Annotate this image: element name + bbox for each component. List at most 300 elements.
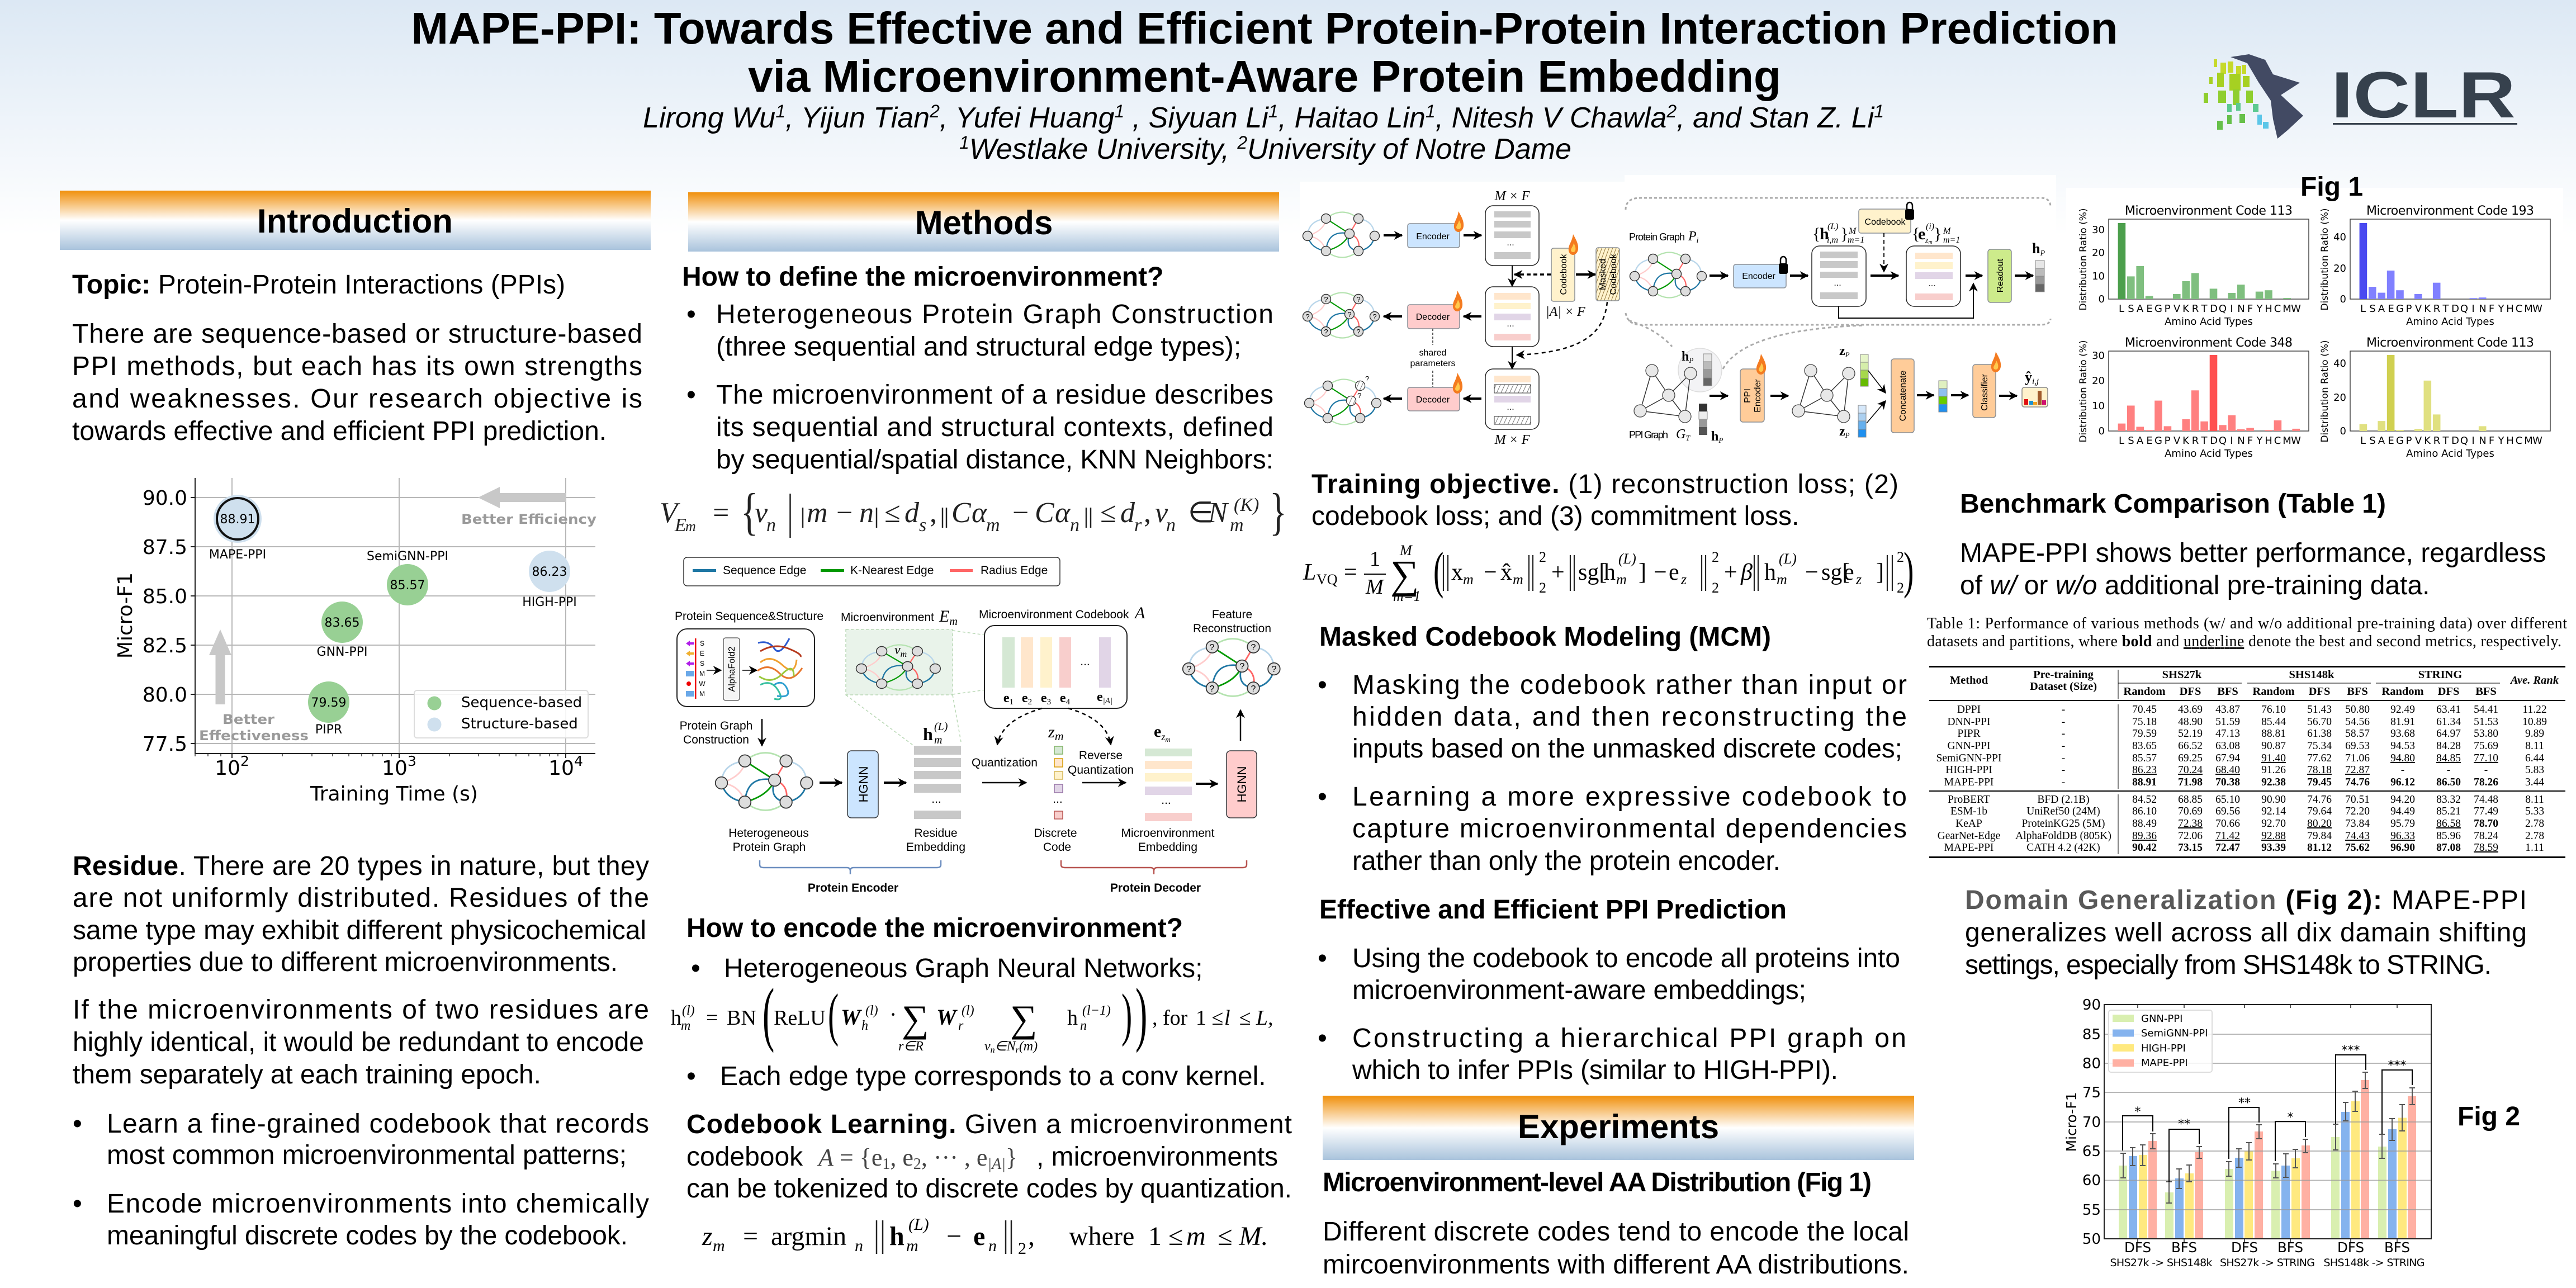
table header: BFS [2475, 685, 2497, 698]
table rows: no pre-training: 48.90 [2178, 716, 2203, 728]
table rows: with pre-training: 73.15 [2178, 842, 2203, 854]
formula: microenvironment definition: V [660, 497, 680, 529]
formula: quantization [702, 1215, 1268, 1258]
row: masked decoding: ? [1357, 391, 1361, 400]
panel: feature reconstruction: ? [1251, 684, 1256, 694]
table rows: no pre-training: 84.85 [2436, 752, 2461, 764]
row: decoder reconstruction: ? [1372, 312, 1377, 321]
chart: code 113 green: P [2165, 303, 2171, 315]
formula: VQ loss: h [1604, 560, 1616, 585]
heading: how to encode: How to encode the microenvironment? [686, 913, 1183, 943]
table rows: no pre-training: 3.44 [2525, 776, 2544, 788]
formula: microenvironment definition: α [972, 497, 988, 529]
formula: microenvironment definition: m [1230, 515, 1244, 536]
table rows: with pre-training: 94.20 [2390, 794, 2415, 806]
chart: training time vs micro-F1 bubbles: HIGH-PPI [522, 595, 577, 609]
panel: protein sequence and structure: W [699, 680, 705, 688]
formula: VQ loss: m [1463, 571, 1474, 588]
table rows: no pre-training: - [2062, 764, 2065, 776]
formula: microenvironment definition: n [1166, 515, 1176, 536]
formula: microenvironment definition: ≤ [1100, 497, 1116, 529]
bullets: definition: The microenvironment of a residue describes [716, 380, 1273, 410]
table rows: with pre-training: 90.90 [2261, 794, 2286, 806]
formula: microenvironment definition: C [951, 497, 972, 529]
panel: microenvironment zoom: m [901, 650, 907, 659]
table rows: no pre-training: 66.52 [2178, 740, 2203, 752]
table rows: no pre-training: - [2447, 764, 2450, 776]
chart: code 348 red: S [2128, 435, 2134, 447]
chart: code 348 red: V [2174, 435, 2181, 447]
chart: domain generalization bars: DFS [2124, 1239, 2151, 1256]
table rows: no pre-training: 63.41 [2436, 704, 2461, 716]
formula: VQ loss: ( [1433, 542, 1443, 599]
text: codebook learning [686, 1110, 1292, 1204]
table rows: no pre-training: 72.87 [2345, 764, 2370, 776]
table rows: with pre-training: 74.48 [2474, 794, 2498, 806]
row: encoder reconstruction: M × F [1494, 189, 1530, 203]
panel: PPI graph encoder: T [1685, 434, 1690, 443]
panel: protein embedding pipeline: Readout [1996, 258, 2005, 292]
text: codebook learning: , e [890, 1144, 913, 1171]
formula: HGNN update: (l) [962, 1003, 974, 1018]
chart: code 113 green: G [2154, 303, 2162, 315]
chart: code 193 blue: L [2360, 303, 2366, 315]
text: AA distribution: Different discrete codes tend to encode the local [1323, 1217, 1909, 1247]
chart: domain generalization bars: BFS [2277, 1239, 2303, 1256]
panel: protein embedding pipeline: P [2039, 249, 2045, 258]
formula: VQ loss: M [1365, 575, 1385, 599]
legend: edge types [684, 557, 1060, 586]
bullets: MCM: rather than only the protein encoder. [1352, 846, 1781, 876]
formula: VQ loss: m [1616, 571, 1627, 588]
panel: protein embedding pipeline: Encoder [1742, 272, 1775, 281]
table rows: no pre-training: PIPR [1957, 728, 1981, 740]
chart: code 113 yellow: R [2433, 435, 2440, 447]
formula: VQ loss: − [1805, 560, 1819, 585]
discrete code squares: Discrete [1034, 827, 1077, 840]
table rows: with pre-training: 96.90 [2390, 842, 2415, 854]
chart: domain generalization bars: Micro-F1 [2063, 1092, 2080, 1152]
table rows: no pre-training: 96.12 [2390, 776, 2415, 788]
panel: PPI graph encoder: i,j [2032, 377, 2039, 386]
encoder HGNN block [820, 751, 906, 818]
panel: PPI graph encoder [1629, 344, 2048, 444]
microenvironment embedding stack [1121, 722, 1215, 854]
chart: code 348 red: Distribution Ratio (%) [2078, 340, 2089, 443]
title [411, 3, 2118, 101]
bullets: PPI prediction: Constructing a hierarchical PPI graph on [1352, 1024, 1906, 1053]
chart: code 113 green: Microenvironment Code 113 [2125, 204, 2293, 218]
chart: code 113 yellow: P [2406, 435, 2412, 447]
formula: quantization: m [1186, 1221, 1206, 1251]
chart: code 113 yellow: C [2516, 435, 2522, 447]
authors: 2 [929, 101, 940, 121]
table rows: no pre-training: - [2062, 716, 2065, 728]
formula: VQ loss: sg[ [1578, 560, 1607, 585]
bullet: HGNN: Heterogeneous Graph Neural Networks; [724, 954, 1202, 983]
table rows: no pre-training: 51.53 [2474, 716, 2498, 728]
formula: HGNN update: ( [828, 982, 839, 1048]
formula: VQ loss: x [1451, 560, 1463, 585]
formula: HGNN update: r [958, 1019, 964, 1033]
bullets: definition: (three sequential and structural edge types); [716, 332, 1241, 362]
chart: training time vs micro-F1 bubbles: 85.57 [390, 579, 425, 593]
panel: microenvironment codebook: Microenvironment Codebook [979, 608, 1129, 621]
chart: training time vs micro-F1 bubbles: 85.0 [143, 585, 187, 608]
chart: code 113 yellow: Distribution Ratio (%) [2319, 340, 2331, 443]
formula: VQ loss: = [1344, 560, 1357, 585]
chart: code 348 red: Q [2219, 435, 2227, 447]
label: shared parameters [1410, 329, 1455, 387]
affiliations: 1 [959, 132, 969, 153]
table rows: no pre-training: 10.89 [2522, 716, 2547, 728]
chart: code 113 green: V [2174, 303, 2181, 315]
table rows: with pre-training: 70.69 [2178, 806, 2203, 817]
table rows: no pre-training: 56.70 [2307, 716, 2332, 728]
brace: protein decoder: Protein Decoder [1110, 882, 1201, 894]
table rows: with pre-training: ProBERT [1948, 794, 1990, 806]
formula: microenvironment definition: = [713, 497, 729, 529]
table header: SHS148k [2289, 669, 2334, 681]
microenvironment embedding stack: Microenvironment [1121, 827, 1215, 840]
panel: microenvironment codebook: e [1060, 691, 1066, 705]
formula: microenvironment definition: (K) [1234, 495, 1259, 515]
table rows: no pre-training: 75.34 [2307, 740, 2332, 752]
text: benchmark summary: MAPE-PPI shows better performance, regardless [1960, 538, 2546, 568]
panel: feature reconstruction: ? [1272, 665, 1277, 674]
table rows: no pre-training: 64.97 [2436, 728, 2461, 740]
formula: HGNN update: n [1080, 1019, 1087, 1033]
table rows: with pre-training: 92.70 [2261, 818, 2286, 830]
formula: HGNN update: ReLU [774, 1006, 826, 1030]
panel: protein sequence and structure [675, 610, 823, 707]
panel: protein embedding pipeline: h [2032, 240, 2040, 257]
discrete code squares: Code [1043, 841, 1071, 854]
chart: domain generalization bars: DFS [2337, 1239, 2364, 1256]
chart: training time vs micro-F1 bubbles: 10 [382, 757, 408, 780]
label: Fig 2: Fig 2 [2457, 1102, 2520, 1131]
heading: benchmark comparison: Benchmark Comparison (Table 1) [1960, 489, 2386, 519]
text: redundancy [73, 995, 649, 1090]
formula: quantization: z [702, 1221, 713, 1251]
chart: code 113 yellow: Y [2498, 435, 2504, 447]
panel: PPI graph encoder: Classifier [1980, 373, 1990, 411]
chart: code 193 blue: E [2388, 303, 2394, 315]
table header: Dataset (Size) [2030, 680, 2097, 693]
residue embedding stack: h [923, 724, 933, 744]
formula: HGNN update: ∑ [902, 997, 929, 1040]
formula: quantization: e [973, 1221, 985, 1251]
table rows: with pre-training: 95.79 [2390, 818, 2415, 830]
table rows: with pre-training: KeAP [1955, 818, 1982, 830]
quantization step [972, 756, 1038, 783]
formula: quantization: where [1069, 1221, 1134, 1251]
chart: domain generalization bars: *** [2341, 1044, 2360, 1058]
formula: VQ loss: β [1740, 560, 1753, 585]
chart: code 113 green: Distribution Ratio (%) [2078, 208, 2089, 311]
chart: code 193 blue: H [2506, 303, 2514, 315]
panel: protein embedding pipeline: ... [1928, 279, 1936, 288]
brace: protein encoder: Protein Encoder [808, 882, 898, 894]
heading: effective and efficient PPI prediction: Effective and Efficient PPI Prediction [1319, 895, 1787, 925]
formula: HGNN update [671, 974, 1273, 1055]
bullets: MCM: • [1318, 782, 1327, 812]
table rows: no pre-training: 69.53 [2345, 740, 2370, 752]
decoder HGNN block [1196, 710, 1257, 818]
chart: code 348 red: K [2182, 435, 2190, 447]
chart: code 113 yellow [2319, 336, 2550, 460]
chart: code 348 red: T [2200, 435, 2208, 447]
text: redundancy: If the microenvironments of two residues are [73, 995, 649, 1025]
chart: code 113 green: A [2137, 303, 2144, 315]
table rows: with pre-training: 93.39 [2261, 842, 2286, 854]
chart: code 348 red: E [2146, 435, 2153, 447]
table rows: no pre-training: 85.57 [2132, 752, 2157, 764]
row: masked decoding: ? [1365, 375, 1369, 383]
chart: code 113 yellow: D [2451, 435, 2459, 447]
table rows: no pre-training: 81.91 [2390, 716, 2415, 728]
chart: code 113 yellow: K [2424, 435, 2431, 447]
formula: quantization: (L) [908, 1215, 929, 1234]
chart: training time vs micro-F1 bubbles: SemiGNN-PPI [367, 550, 448, 564]
table rows: no pre-training: 70.24 [2178, 764, 2203, 776]
chart: code 193 blue: Distribution Ratio (%) [2319, 208, 2331, 311]
table rows: with pre-training: 72.47 [2215, 842, 2240, 854]
chart: domain generalization bars: *** [2388, 1059, 2406, 1073]
bars: SHS27k to SHS148k [2119, 1141, 2203, 1239]
table rows: with pre-training: 85.96 [2436, 830, 2461, 842]
chart: code 193 blue: C [2516, 303, 2522, 315]
chart: training time vs micro-F1 bubbles: 86.23 [532, 565, 567, 579]
formula: quantization: h [889, 1221, 905, 1251]
panel: PPI graph encoder: Encoder [1753, 379, 1763, 413]
chart: training time vs micro-F1 bubbles: 82.5 [143, 634, 187, 657]
text: research objective: towards effective and efficient PPI prediction. [72, 416, 607, 446]
authors: 1 [1426, 101, 1436, 121]
chart: code 193 blue: Y [2498, 303, 2504, 315]
chart: code 348 red: 10 [2092, 400, 2105, 412]
table rows: with pre-training: 85.21 [2436, 806, 2461, 817]
chart: domain generalization bars: BFS [2384, 1239, 2410, 1256]
table rows: no pre-training: 93.68 [2390, 728, 2415, 740]
chart: code 348 red: F [2247, 435, 2253, 447]
heading: Experiments: Experiments [1518, 1108, 1719, 1145]
residue embedding stack: Residue [914, 827, 958, 840]
table rows: no pre-training: 71.06 [2345, 752, 2370, 764]
chart: code 348 red: I [2230, 435, 2233, 447]
panel: PPI graph encoder: PPI Graph [1629, 429, 1668, 441]
table rows: with pre-training: 80.20 [2307, 818, 2332, 830]
bullet: conv kernel: • [686, 1062, 696, 1091]
table rows: no pre-training: 71.98 [2178, 776, 2203, 788]
chart: training time vs micro-F1 bubbles: 10 [215, 757, 240, 780]
chart: code 193 blue: S [2369, 303, 2376, 315]
table rows: no pre-training: 78.18 [2307, 764, 2332, 776]
formula: quantization: − [946, 1221, 962, 1251]
formula: quantization: argmin [771, 1221, 846, 1251]
bullets: codebook aims: • [73, 1109, 82, 1139]
panel: protein embedding pipeline: { [1812, 225, 1820, 243]
discrete code squares [1034, 723, 1077, 854]
table rows: no pre-training: 11.22 [2522, 704, 2547, 716]
chart: training time vs micro-F1 bubbles: 77.5 [143, 733, 187, 756]
row: decoder reconstruction [1303, 287, 1607, 369]
panel: microenvironment codebook: A [1134, 604, 1145, 622]
table rows: with pre-training: 87.08 [2436, 842, 2461, 854]
microenvironment embedding stack: Embedding [1138, 841, 1197, 854]
table rows: no pre-training: 94.53 [2390, 740, 2415, 752]
panel: PPI graph encoder: z [1839, 424, 1845, 439]
table rows: no pre-training: 78.26 [2474, 776, 2498, 788]
authors: 2 [1666, 101, 1677, 121]
panel: microenvironment zoom: Microenvironment [841, 611, 934, 624]
text: AA distribution: mircoenvironments with different AA distributions. [1323, 1250, 1909, 1280]
table rows: no pre-training: 43.69 [2178, 704, 2203, 716]
chart: code 113 yellow: I [2471, 435, 2475, 447]
formula: VQ loss: sg[ [1821, 560, 1850, 585]
table rows: with pre-training: 77.49 [2474, 806, 2498, 817]
chart: training time vs micro-F1 bubbles: 80.0 [143, 684, 187, 707]
panel: protein embedding pipeline: (L) [1827, 222, 1839, 231]
row: decoder reconstruction: ? [1305, 312, 1310, 321]
table rows: with pre-training: 86.58 [2436, 818, 2461, 830]
table rows: no pre-training: 69.25 [2178, 752, 2203, 764]
formula: microenvironment definition: m [685, 518, 696, 534]
formula: microenvironment definition: } [1270, 484, 1287, 541]
chart: code 113 yellow: Microenvironment Code 113 [2366, 336, 2534, 350]
formula: VQ loss: e [1669, 560, 1679, 585]
table rows: no pre-training: 88.81 [2261, 728, 2286, 740]
legend: edge types: K-Nearest Edge [850, 564, 934, 577]
row: masked decoding: M × F [1494, 433, 1530, 447]
formula: HGNN update: = [706, 1006, 718, 1030]
panel: protein embedding pipeline: P [1688, 229, 1697, 244]
table rows: no pre-training: 61.34 [2436, 716, 2461, 728]
formula: HGNN update: v [984, 1039, 991, 1054]
chart: code 113 yellow: Amino Acid Types [2406, 448, 2494, 460]
table rows: with pre-training: CATH 4.2 (42K) [2026, 842, 2100, 854]
bullet: HGNN: • [691, 954, 700, 983]
table rows: with pre-training: 2.78 [2525, 830, 2544, 842]
table rows: no pre-training: 68.40 [2215, 764, 2240, 776]
chart: domain generalization bars: SHS148k -> STRING [2323, 1257, 2425, 1269]
table rows: with pre-training: 92.14 [2261, 806, 2286, 817]
chart: code 113 yellow: 40 [2333, 358, 2346, 370]
formula: HGNN update: ∑ [1010, 997, 1037, 1040]
table rows: with pre-training: AlphaFoldDB (805K) [2015, 830, 2111, 842]
table header: STRING [2418, 669, 2462, 681]
chart: code 113 green: S [2128, 303, 2134, 315]
text: domain generalization [1965, 886, 2527, 980]
chart: code 113 green: 30 [2092, 224, 2105, 236]
table rows: no pre-training: MAPE-PPI [1944, 776, 1993, 788]
chart: training time vs micro-F1 bubbles: Better [222, 712, 274, 727]
row: decoder reconstruction: ? [1356, 328, 1361, 336]
bars: SHS27k to STRING [2225, 1131, 2310, 1239]
chart: code 348 red: H [2265, 435, 2272, 447]
text: codebook learning: codebook [686, 1142, 803, 1172]
table rows: no pre-training: SemiGNN-PPI [1936, 752, 2002, 764]
formula: VQ loss: x̂ [1500, 560, 1512, 585]
chart: code 113 green: 10 [2092, 271, 2105, 282]
formula: HGNN update: (l) [682, 1003, 695, 1018]
panel: protein embedding pipeline: z [1925, 236, 1928, 245]
formula: microenvironment definition: m [986, 515, 1000, 536]
authors: , Yijun Tian [785, 102, 930, 134]
chart: training time vs micro-F1 bubbles: 2 [240, 753, 249, 769]
table rows: no pre-training: 92.38 [2261, 776, 2286, 788]
table rows: with pre-training: 72.06 [2178, 830, 2203, 842]
formula: microenvironment definition: s [919, 515, 926, 536]
panel: feature reconstruction [1183, 608, 1280, 696]
table header: DFS [2180, 685, 2201, 698]
table header: Pre-training [2033, 669, 2094, 681]
chart: code 348 red: R [2192, 435, 2199, 447]
text: domain generalization: generalizes well across all dix damain shifting [1965, 918, 2527, 948]
formula: HGNN update: , for [1152, 1006, 1188, 1030]
panel: protein embedding pipeline: (i) [1926, 222, 1934, 231]
formula: microenvironment definition: C [1035, 497, 1055, 529]
chart: code 348 red: M [2283, 435, 2291, 447]
chart: domain generalization bars: 85 [2082, 1026, 2101, 1043]
chart: code 348 red: C [2274, 435, 2281, 447]
residue embedding stack: (L) [934, 721, 948, 733]
bullets: definition: Heterogeneous Protein Graph Construction [716, 300, 1273, 329]
text: codebook learning: , microenvironments [1036, 1142, 1278, 1172]
formula: VQ loss: − [1654, 560, 1667, 585]
bullets: MCM: • [1318, 670, 1327, 700]
chart: code 113 yellow: H [2506, 435, 2514, 447]
label: protein graph construction: Construction [683, 733, 749, 746]
formula: quantization: = [743, 1221, 758, 1251]
panel: protein embedding pipeline: m=1 [1848, 235, 1864, 245]
table rows: no pre-training: - [2062, 704, 2065, 716]
chart: domain generalization bars: DFS [2231, 1239, 2258, 1256]
chart: code 113 green: T [2200, 303, 2208, 315]
formula: VQ loss: (L) [1779, 551, 1797, 567]
formula: VQ loss: L [1303, 560, 1316, 585]
panel: microenvironment codebook: |A| [1103, 697, 1112, 705]
table rows: with pre-training: 78.70 [2474, 818, 2498, 830]
chart: code 113 yellow: M [2524, 435, 2533, 447]
table rows: no pre-training: 9.89 [2525, 728, 2544, 740]
panel: PPI graph encoder: h [1711, 429, 1718, 444]
table rows: no pre-training: 70.45 [2132, 704, 2157, 716]
panel: microenvironment codebook: 3 [1047, 698, 1051, 707]
bullets: PPI prediction: • [1318, 1024, 1327, 1053]
table rows: with pre-training: 74.76 [2307, 794, 2332, 806]
reverse quantization step: Reverse [1079, 749, 1123, 762]
text: residue [73, 851, 649, 977]
authors: , Nitesh V Chawla [1436, 102, 1666, 134]
chart: training time vs micro-F1 bubbles: 83.65 [325, 616, 359, 630]
panel: feature reconstruction: ? [1240, 662, 1245, 671]
panel: protein embedding pipeline: m=1 [1943, 235, 1960, 245]
chart: code 113 green: F [2247, 303, 2253, 315]
authors: Lirong Wu [643, 102, 775, 134]
panel: PPI graph encoder: h [1682, 349, 1689, 364]
formula: HGNN update: ) [1121, 982, 1132, 1048]
text: redundancy: them separately at each training epoch. [73, 1060, 541, 1090]
chart: code 348 red: Amino Acid Types [2165, 448, 2253, 460]
authors: 1 [1268, 101, 1278, 121]
formula: VQ loss: ∑ [1390, 552, 1419, 597]
bullets: definition: • [686, 300, 696, 329]
bullets: PPI prediction: microenvironment-aware embeddings; [1352, 976, 1806, 1005]
table rows: with pre-training: 73.84 [2345, 818, 2370, 830]
chart: code 113 yellow: S [2369, 435, 2376, 447]
table header: Method [1950, 674, 1988, 686]
